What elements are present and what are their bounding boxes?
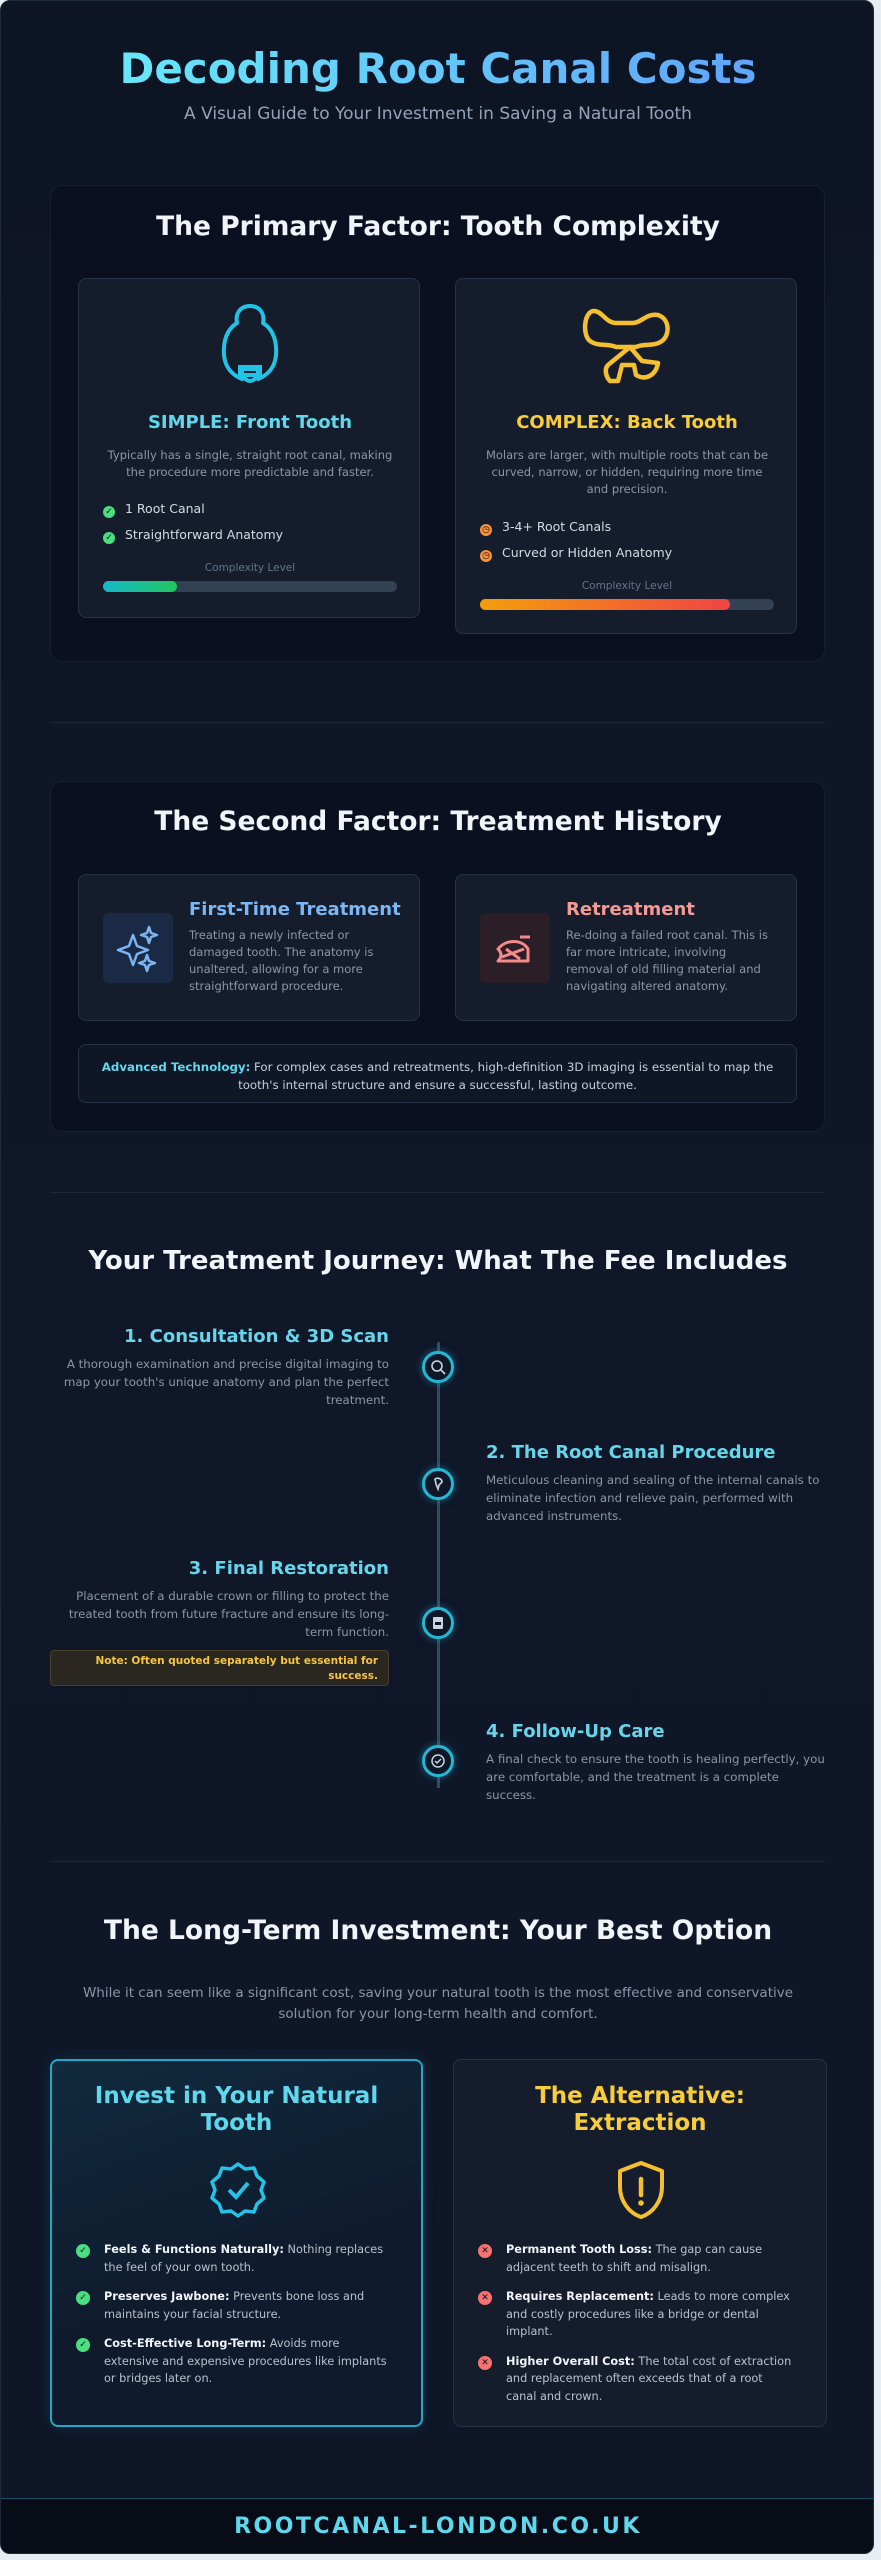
card description: Typically has a single, straight root canal, making the procedure more predictable and faster. [108, 448, 392, 479]
list: benefits: Preserves Jawbone: Prevents bone loss and maintains your facial structure. [104, 2290, 364, 2320]
list: drawbacks: ✕ [481, 2358, 489, 2368]
title: The Alternative: [535, 2083, 745, 2109]
card: first-time treatment [78, 874, 420, 1021]
list: features: ✓ [105, 507, 113, 517]
description: Re-doing a failed root canal. This is far more intricate, involving removal of old filling material and navigating altered anatomy. [566, 928, 768, 993]
title: Retreatment [566, 899, 695, 920]
title [95, 2083, 378, 2136]
title: Invest in Your Natural [95, 2083, 378, 2109]
node: step 4 check [422, 1745, 454, 1777]
card title: COMPLEX: Back Tooth [516, 412, 738, 433]
icon: front tooth [222, 304, 278, 383]
card: retreatment [455, 874, 797, 1021]
list: benefits: ✓ [79, 2246, 87, 2256]
note: restoration [50, 1650, 389, 1686]
heading: primary factor: The Primary Factor: Tooth Complexity [156, 211, 720, 242]
intro paragraph: While it can seem like a significant cost, saving your natural tooth is the most effective and conservative solution for your long-term health and comfort. [83, 1985, 793, 2022]
note: restoration: Note: Often quoted separately but essential for success. [95, 1655, 378, 1682]
list: drawbacks [478, 2243, 791, 2402]
step 1: A thorough examination and precise digital imaging to map your tooth's unique anatomy and plan the perfect treatment. [64, 1357, 389, 1407]
step 4: A final check to ensure the tooth is healing perfectly, you are comfortable, and the treatment is a complete success. [486, 1752, 825, 1802]
list: features: 3-4+ Root Canals [502, 519, 611, 534]
callout: advanced technology [78, 1044, 797, 1103]
heading: second factor: The Second Factor: Treatment History [154, 806, 722, 837]
card: complex back tooth [455, 278, 797, 634]
card: complex back tooth: ◷ [482, 551, 490, 561]
step 2: Meticulous cleaning and sealing of the internal canals to eliminate infection and relieve pain, performed with advanced instruments. [486, 1473, 819, 1523]
card: complex back tooth: Curved or Hidden Anatomy [502, 545, 672, 560]
step 2: 2. The Root Canal Procedure [486, 1442, 776, 1463]
icon: molar [582, 308, 670, 384]
timeline line [437, 1342, 440, 1788]
card title: SIMPLE: Front Tooth [148, 412, 352, 433]
card: extraction alternative [453, 2059, 827, 2427]
panel: tooth complexity [50, 185, 825, 662]
icon: warning shield [618, 2161, 664, 2219]
step 4: 4. Follow-Up Care [486, 1721, 665, 1742]
list: benefits: ✓ [79, 2340, 87, 2350]
list: benefits: Cost-Effective Long-Term: Avoids more extensive and expensive procedures like implants or bridges later on. [104, 2337, 387, 2385]
subtitle: A Visual Guide to Your Investment in Saving a Natural Tooth [184, 104, 692, 124]
list: features [103, 501, 205, 518]
node: step 1 search [422, 1351, 454, 1383]
step 3 [69, 1558, 389, 1639]
card: simple front tooth: Straightforward Anatomy [125, 527, 283, 542]
complexity bar [103, 562, 397, 592]
list: benefits [76, 2243, 387, 2385]
description: Treating a newly infected or damaged tooth. The anatomy is unaltered, allowing for a more straightforward procedure. [189, 928, 373, 993]
list: features: ◷ [482, 525, 490, 535]
icon: badge check [210, 2162, 266, 2218]
list: drawbacks: ✕ [481, 2246, 489, 2256]
footer: ROOTCANAL-LONDON.CO.UK [234, 2514, 642, 2539]
card: simple front tooth: ✓ [105, 533, 113, 543]
card description: Molars are larger, with multiple roots that can be curved, narrow, or hidden, requiring more time and precision. [486, 448, 768, 496]
card: invest in natural tooth [50, 2059, 423, 2427]
list: benefits: ✓ [79, 2293, 87, 2303]
callout: advanced technology: Advanced Technology: For complex cases and retreatments, high-definition 3D imaging is essential to map the tooth's internal structure and ensure a successful, lasting outcome. [102, 1060, 773, 1092]
node: step 2 tooth [422, 1468, 454, 1500]
title: Extraction [573, 2110, 707, 2136]
step 1 [64, 1326, 389, 1407]
icon: sparkles [103, 913, 173, 983]
step 3: Placement of a durable crown or filling to protect the treated tooth from future fracture and ensure its long-term function. [69, 1589, 389, 1639]
complexity bar: Complexity Level [582, 580, 672, 592]
step 2 [486, 1442, 819, 1523]
list: drawbacks: Higher Overall Cost: The total cost of extraction and replacement often exceeds that of a root canal and crown. [506, 2354, 791, 2402]
icon: retreatment tool [480, 913, 550, 983]
footer [1, 2498, 875, 2555]
node: step 3 crown [422, 1607, 454, 1639]
heading: long-term investment: The Long-Term Investment: Your Best Option [104, 1915, 772, 1946]
title: Tooth [201, 2110, 272, 2136]
title: First-Time Treatment [189, 899, 401, 920]
list: features: 1 Root Canal [125, 501, 205, 516]
heading: treatment journey: Your Treatment Journey: What The Fee Includes [88, 1246, 788, 1276]
complexity bar: Complexity Level [205, 562, 295, 574]
step 1: 1. Consultation & 3D Scan [124, 1326, 389, 1347]
list: benefits: Feels & Functions Naturally: Nothing replaces the feel of your own tooth. [104, 2243, 383, 2274]
list: drawbacks: ✕ [481, 2293, 489, 2303]
card: simple front tooth [78, 278, 420, 618]
panel: treatment history [50, 781, 825, 1132]
step 4 [486, 1721, 825, 1802]
title: Decoding Root Canal Costs [119, 44, 757, 93]
complexity bar [480, 580, 774, 610]
title [535, 2083, 745, 2136]
step 3: 3. Final Restoration [189, 1558, 389, 1579]
list: drawbacks: Requires Replacement: Leads to more complex and costly procedures like a bridge or dental implant. [506, 2290, 790, 2338]
list: drawbacks: Permanent Tooth Loss: The gap can cause adjacent teeth to shift and misalign. [506, 2243, 762, 2274]
